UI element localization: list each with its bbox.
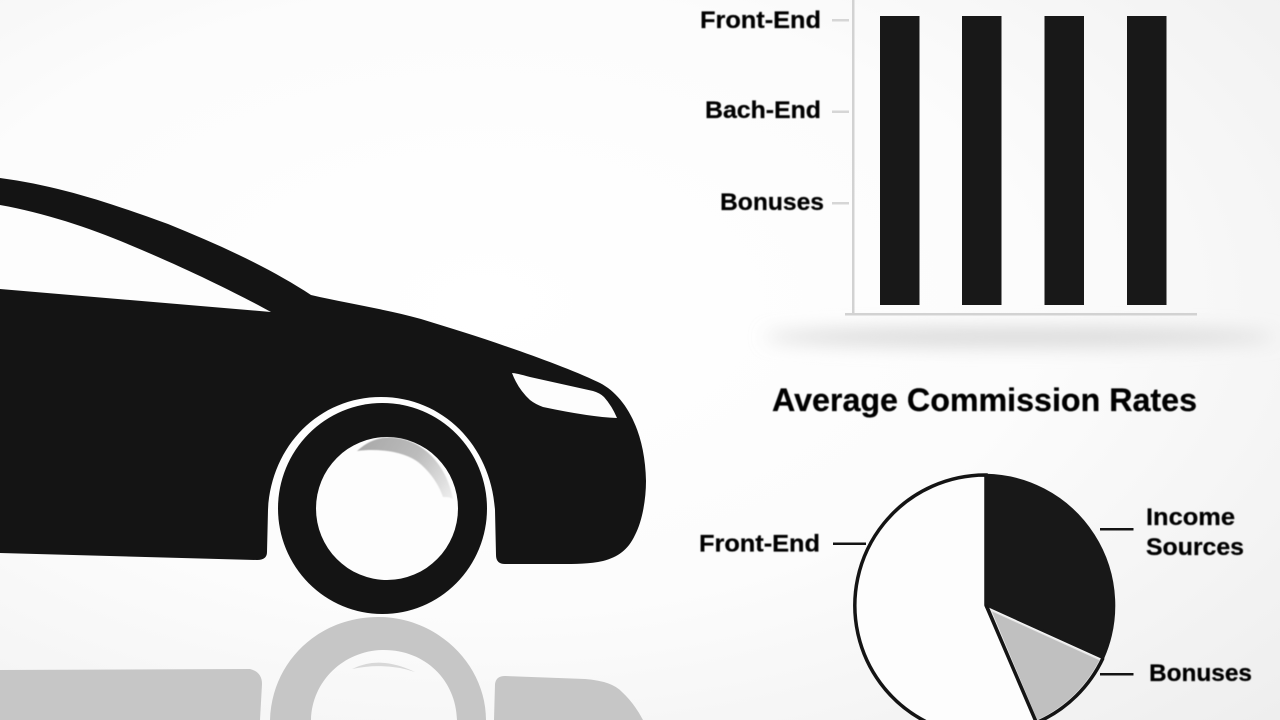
pie label: Income Sources: Income	[1146, 504, 1235, 531]
headlight	[512, 373, 617, 418]
pie label: Bonuses: Bonuses	[1149, 660, 1252, 687]
leader: Bonuses	[1100, 673, 1134, 676]
car side window	[0, 205, 271, 312]
chart floor shadow	[765, 327, 1275, 347]
chart axes	[845, 0, 1197, 316]
pie slice: front-end	[855, 475, 1040, 720]
bars	[880, 16, 1166, 305]
car body	[0, 178, 646, 564]
bar chart	[700, 0, 1275, 347]
pie label: Income Sources: Sources	[1146, 534, 1244, 561]
pie slice: income sources	[986, 475, 1114, 658]
leader: Income Sources	[1100, 528, 1134, 530]
pie chart	[699, 475, 1252, 720]
leader: Front-End	[833, 542, 866, 545]
front wheel	[278, 403, 487, 614]
wheel highlight	[357, 438, 453, 499]
tick marks	[832, 19, 849, 204]
pie label: Front-End: Front-End	[699, 530, 820, 558]
pie chart heading: Average Commission Rates	[772, 382, 1197, 418]
axis label: Back-End: Bach-End	[705, 97, 821, 124]
car silhouette	[0, 178, 646, 614]
axis label: Bonuses: Bonuses	[720, 189, 824, 216]
pie slice outline	[986, 605, 1103, 720]
car reflection	[0, 617, 643, 720]
axis label: Front-End: Front-End	[700, 7, 821, 34]
pie slice: bonuses	[991, 610, 1100, 720]
